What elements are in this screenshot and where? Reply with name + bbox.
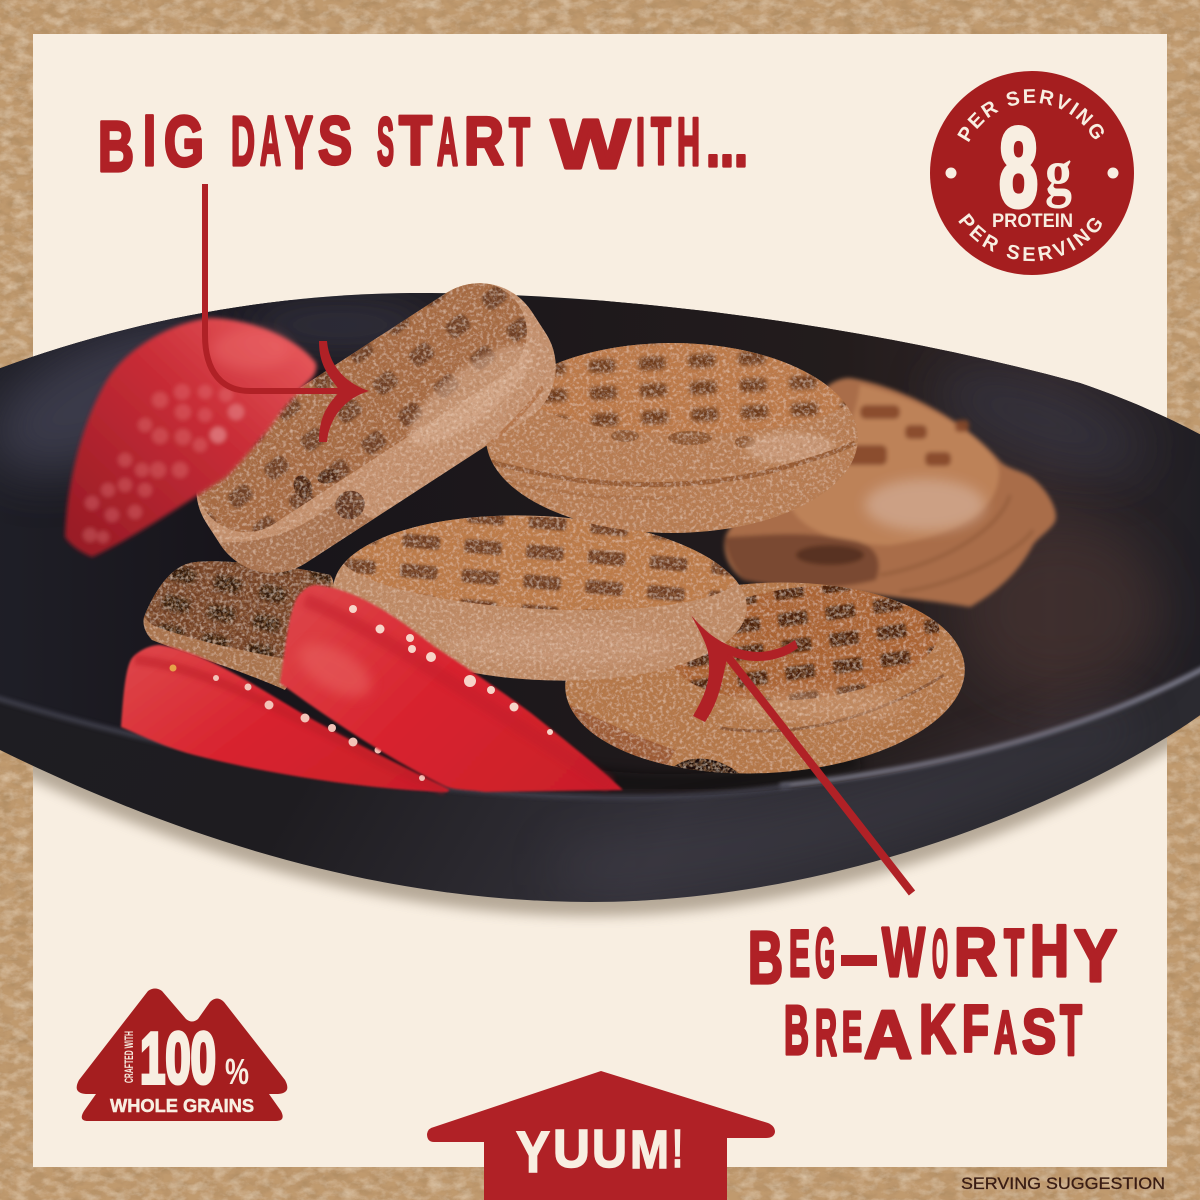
yuum label: Y [516, 1120, 550, 1185]
heading: big days start with: T [399, 101, 432, 179]
waffle: centre front [333, 515, 747, 681]
crafted with: CRAFTED WITH [122, 1031, 136, 1083]
caption: beg-worthy breakfast: A [864, 997, 912, 1073]
heading: big days start with: T [651, 104, 671, 179]
caption: beg-worthy breakfast: W [882, 913, 925, 991]
heading: big days start with: S [318, 103, 352, 179]
heading: big days start with: D [231, 102, 255, 180]
plate [0, 280, 1200, 920]
caption: beg-worthy breakfast: B [748, 916, 783, 999]
heading: big days start with: I [636, 104, 645, 180]
heading: big days start with: G [164, 103, 204, 182]
badge text: per serving top: PER SERVING [957, 89, 1104, 142]
heading: big days start with: R [464, 103, 504, 179]
plate shadow [33, 737, 1167, 923]
caption: beg-worthy breakfast: R [815, 995, 837, 1069]
caption: beg-worthy breakfast [748, 911, 1117, 1073]
heading: big days start with: A [437, 104, 458, 180]
heading: big days start with [98, 101, 748, 187]
arrow: from headline to top waffle [205, 184, 369, 442]
heading: big days start with: A [260, 102, 281, 180]
heading: big days start with: I [143, 102, 156, 181]
100 percent: 100 [140, 1019, 216, 1099]
yuum label: U [592, 1119, 627, 1179]
yuum label: U [553, 1119, 590, 1179]
arrow: from caption to front waffle [691, 615, 912, 893]
heading: big days start with: H [677, 104, 700, 180]
yuum label [516, 1119, 683, 1185]
badge text: per serving bottom: PER SERVING [958, 213, 1102, 262]
caption: beg-worthy breakfast: G [815, 914, 835, 992]
strawberry: back left [65, 318, 316, 557]
caption: beg-worthy breakfast: A [994, 999, 1017, 1066]
badge unit: g [1045, 136, 1072, 209]
caption: beg-worthy breakfast: T [1004, 915, 1024, 989]
caption: beg-worthy breakfast: R [954, 914, 997, 990]
caption: beg-worthy breakfast: F [962, 991, 989, 1065]
waffle: top left, tilted [196, 283, 556, 573]
arrow tab: yuum [427, 1071, 775, 1200]
caption: beg-worthy breakfast: H [1030, 911, 1069, 992]
whole grains: WHOLE GRAINS [110, 1096, 254, 1116]
badge dot left [946, 168, 956, 178]
photo: plate of waffles with strawberries [0, 270, 1200, 920]
caption: beg-worthy breakfast: S [1022, 998, 1056, 1067]
heading: big days start with: T [509, 104, 530, 180]
caption: beg-worthy breakfast: B [784, 991, 809, 1069]
waffle: bottom left, dark [144, 561, 334, 690]
badge number: 8 [999, 105, 1038, 230]
badge: 100% whole grains mountain [77, 988, 287, 1121]
percent sign: % [225, 1051, 249, 1092]
heading: big days start with: ... [706, 103, 748, 181]
waffle: bottom right [565, 582, 965, 774]
caption: beg-worthy breakfast: E [842, 1000, 862, 1064]
caption: beg-worthy breakfast: Y [1074, 916, 1117, 997]
caption: beg-worthy breakfast: O [932, 916, 948, 992]
strawberry: front centre [280, 585, 623, 792]
heading: big days start with: W [551, 105, 630, 183]
waffle: back right stack (soft focus) [724, 378, 1056, 607]
badge dot right [1108, 168, 1118, 178]
caption: beg-worthy breakfast: T [1060, 992, 1082, 1071]
badge: 8g protein per serving [930, 71, 1134, 275]
waffle: top middle [480, 335, 865, 538]
yuum label: M [630, 1120, 669, 1180]
heading: big days start with: B [98, 108, 134, 187]
badge label: PROTEIN [992, 211, 1073, 232]
caption: beg-worthy breakfast: K [919, 990, 956, 1068]
yuum label: ! [672, 1119, 683, 1179]
caption: beg-worthy breakfast: E [789, 916, 810, 990]
footnote: serving suggestion: SERVING SUGGESTION [961, 1174, 1165, 1193]
heading: big days start with: S [377, 104, 394, 180]
strawberry: front left [121, 645, 450, 792]
heading: big days start with: Y [285, 101, 313, 184]
